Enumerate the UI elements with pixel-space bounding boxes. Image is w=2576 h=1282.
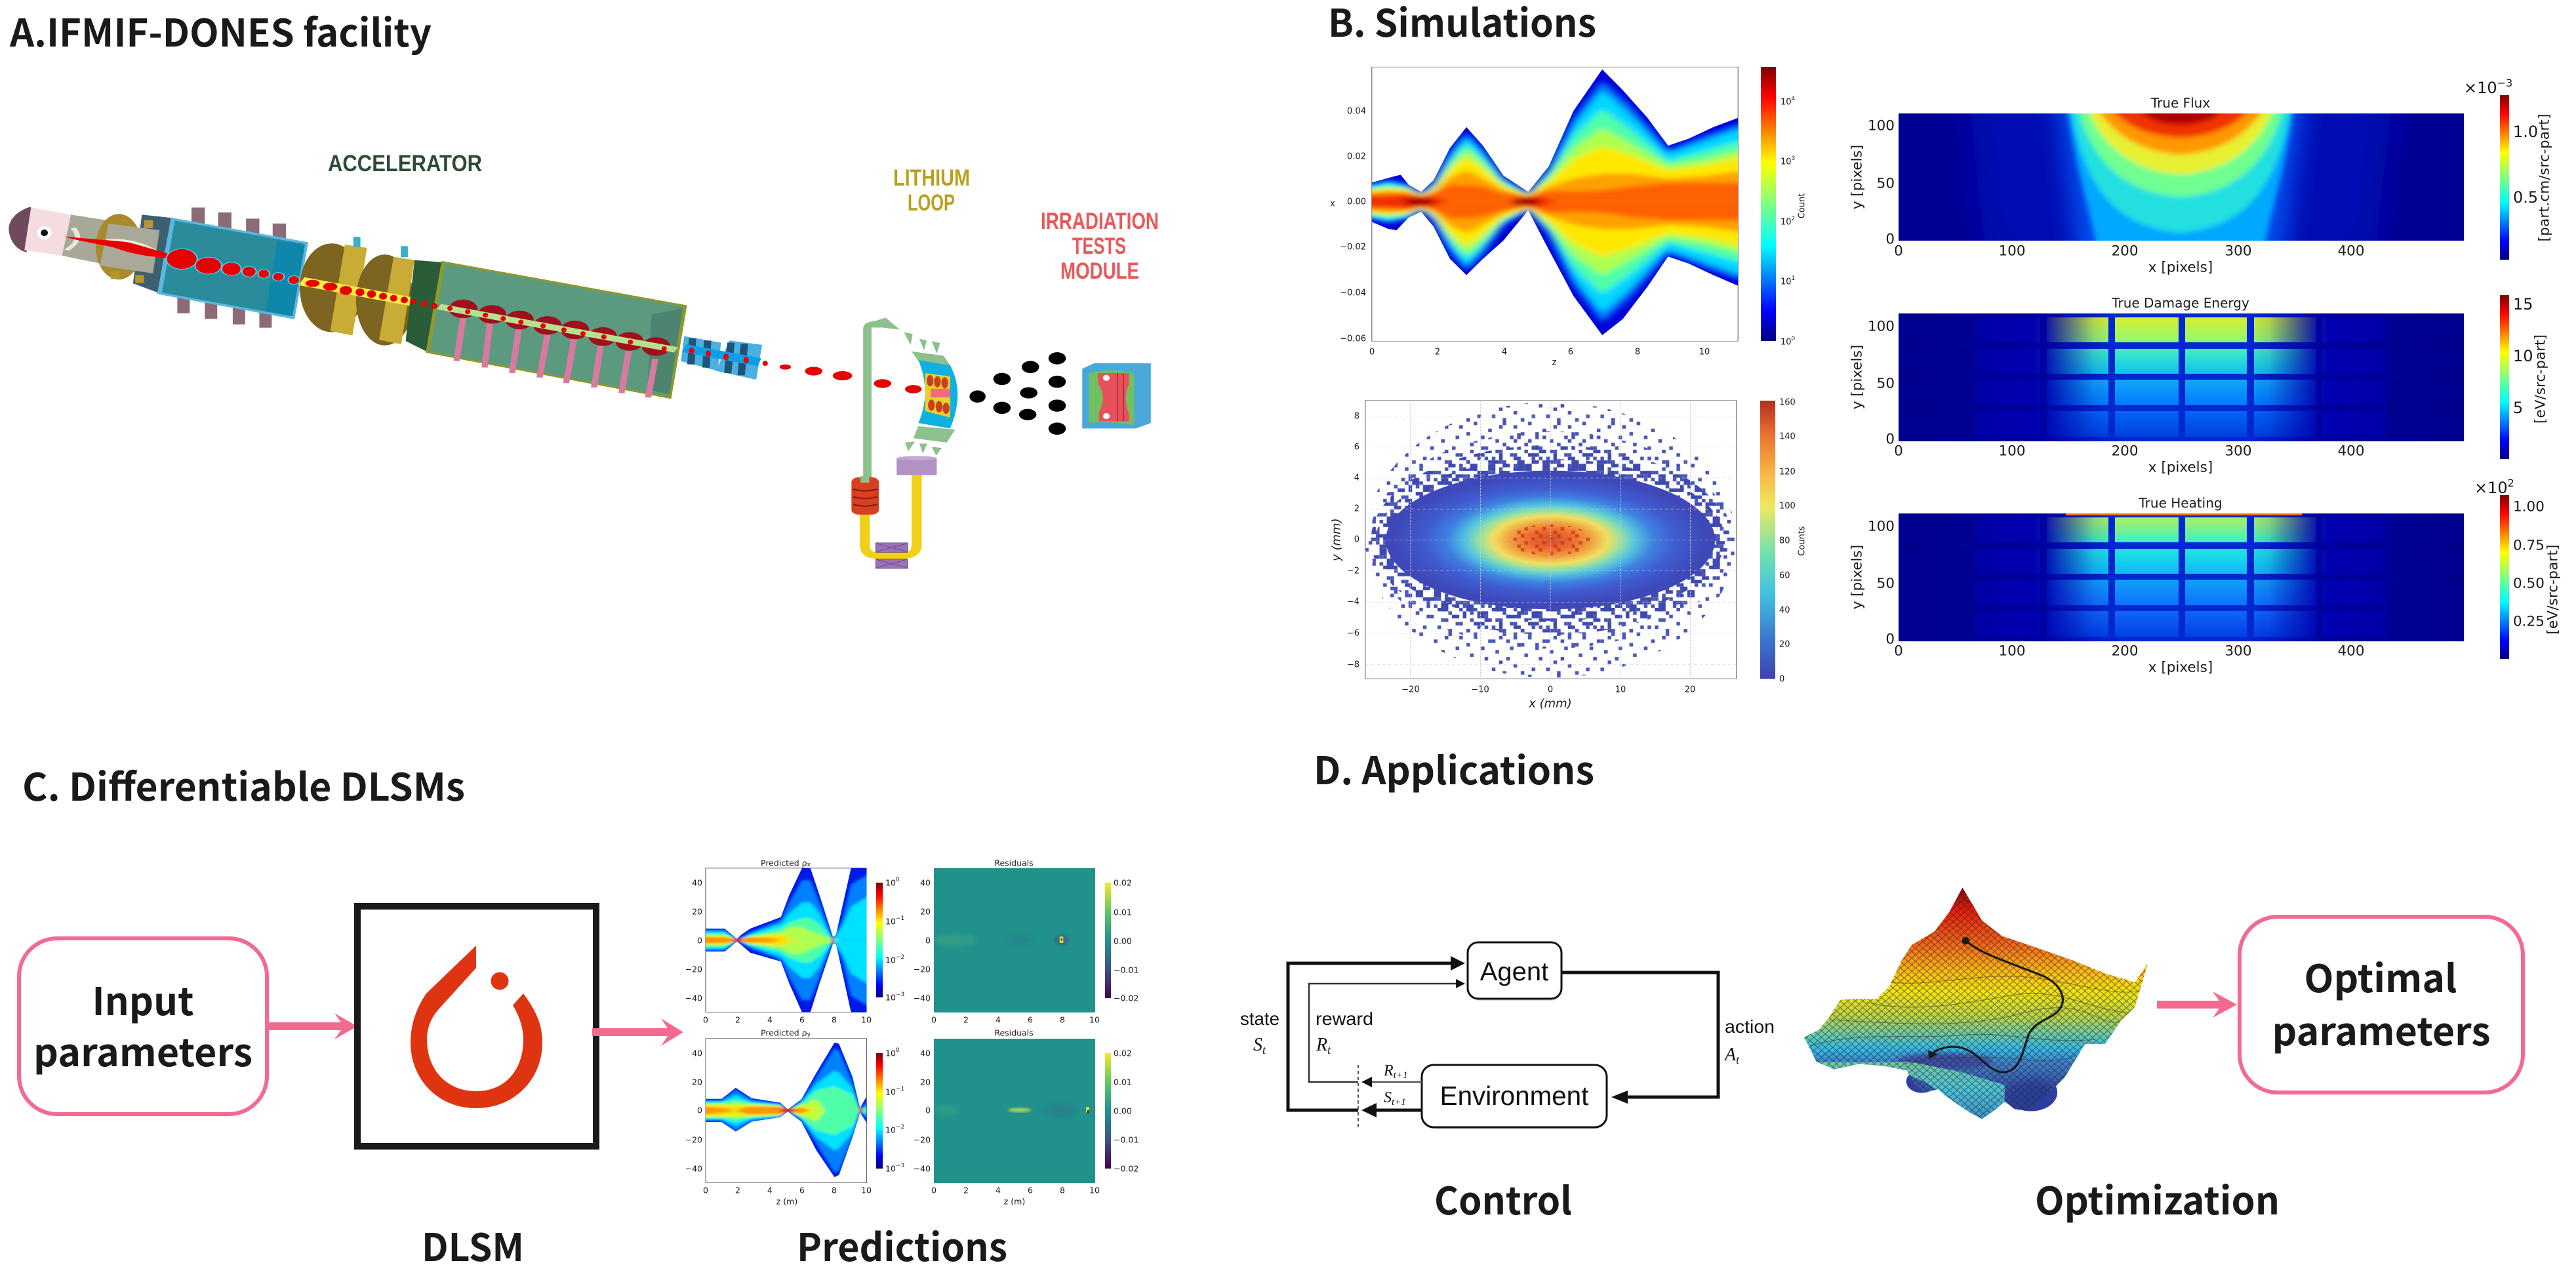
- prediction plot ticks and titles: 4: [996, 1186, 1001, 1195]
- axis titles: [1330, 518, 1572, 711]
- prediction plot ticks and titles: 2: [963, 1186, 969, 1195]
- axis ticks and labels: 0.04: [1347, 106, 1366, 117]
- return pipe and flow arrows: [856, 318, 942, 484]
- axis ticks and labels: 10: [1781, 337, 1792, 348]
- ticks and labels: [1849, 295, 2548, 476]
- axis ticks and labels: x: [1330, 199, 1335, 209]
- axis ticks and labels: −8: [1347, 660, 1359, 670]
- axis ticks and labels: 8: [1354, 412, 1359, 421]
- axis ticks and labels: 2: [1792, 216, 1795, 222]
- axis ticks and labels: 4: [1354, 473, 1359, 483]
- panel B: simulations: [1328, 0, 2562, 711]
- prediction plot ticks and titles: 0.01: [1114, 908, 1132, 917]
- input parameters box: Input: [92, 971, 194, 1026]
- axis ticks and labels: −20: [1401, 685, 1420, 695]
- ticks and labels: −3: [2497, 76, 2512, 89]
- loop labels: R: [1316, 1035, 1327, 1055]
- axis ticks and labels: 10: [1781, 97, 1792, 108]
- axis ticks and labels: 2: [1354, 504, 1359, 514]
- ticks and labels: 100: [1998, 643, 2026, 660]
- axis ticks and labels: 8: [1635, 348, 1640, 357]
- input parameters box: parameters: [33, 1022, 252, 1077]
- loop labels: t+1: [1394, 1070, 1407, 1081]
- axis ticks and labels: 4: [1502, 348, 1507, 357]
- ticks and labels: 0.75: [2513, 538, 2545, 553]
- loop labels: [1240, 1009, 1775, 1108]
- axis ticks and labels: 160: [1779, 397, 1796, 408]
- ticks and labels: 0.50: [2513, 576, 2545, 591]
- axis titles: x (mm): [1528, 696, 1572, 711]
- ticks and labels: x [pixels]: [2148, 459, 2213, 476]
- ticks and labels: True Flux: [2150, 95, 2210, 111]
- ticks and labels: 400: [2337, 243, 2365, 260]
- DLSM box: [357, 906, 596, 1146]
- prediction plot ticks and titles: 10: [885, 993, 896, 1002]
- axis ticks and labels: Count: [1797, 193, 1807, 218]
- ticks and labels: x [pixels]: [2148, 260, 2213, 275]
- accelerator illustration: [9, 207, 685, 397]
- caption: DLSM: DLSM: [422, 1217, 524, 1272]
- prediction plot ticks and titles: 4: [767, 1015, 773, 1024]
- prediction plot ticks and titles: Residuals: [994, 1028, 1034, 1037]
- prediction plot ticks and titles: 10: [885, 877, 896, 888]
- action arrow: [1562, 972, 1718, 1104]
- ticks and labels: 0: [1885, 231, 1895, 248]
- ticks and labels: 0.25: [2513, 614, 2545, 630]
- ticks and labels: 100: [1868, 518, 1895, 535]
- prediction plot ticks and titles: Residuals: [994, 858, 1034, 868]
- loop labels: R: [1384, 1062, 1394, 1079]
- panel C: differentiable DLSMs: [19, 757, 1138, 1272]
- colorbar: [1760, 401, 1775, 679]
- axis ticks and labels: 10: [1781, 218, 1792, 227]
- chart: optimization loss surface: [1799, 885, 2150, 1121]
- axis ticks and labels: 10: [1781, 277, 1792, 287]
- ticks and labels: 50: [1877, 176, 1895, 191]
- axis ticks and labels: [1330, 96, 1807, 367]
- heading D: D. Applications: [1314, 740, 1594, 795]
- loop labels: S: [1384, 1089, 1392, 1106]
- prediction plot ticks and titles: −20: [685, 1134, 702, 1145]
- ticks and labels: 1.0: [2513, 123, 2538, 141]
- prediction plot ticks and titles: 10: [885, 1087, 896, 1096]
- prediction plot ticks and titles: −20: [914, 964, 931, 974]
- prediction plot ticks and titles: −20: [685, 964, 702, 974]
- prediction plot ticks and titles: 0: [925, 935, 931, 946]
- chart: residuals rho x: [934, 868, 1111, 1012]
- beam bunches: [689, 348, 921, 393]
- ticks and labels: 50: [1877, 375, 1895, 392]
- axis ticks and labels: 0: [1792, 336, 1796, 342]
- axis ticks and labels: 0: [1548, 685, 1553, 695]
- axis ticks and labels: 4: [1792, 96, 1796, 102]
- prediction plot ticks and titles: −0.02: [1114, 1163, 1138, 1174]
- ticks and labels: 400: [2337, 443, 2365, 459]
- axis ticks and labels: −4: [1347, 597, 1359, 607]
- arrow: input to DLSM: [268, 1013, 357, 1039]
- ticks and labels: y [pixels]: [1849, 145, 1865, 209]
- prediction plot ticks and titles: 0: [896, 877, 900, 883]
- ticks and labels: 300: [2224, 643, 2252, 660]
- valves: [876, 543, 908, 569]
- axis ticks and labels: 120: [1779, 467, 1796, 477]
- label: lithium loop: LITHIUM: [893, 165, 970, 191]
- loop labels: t: [1327, 1043, 1331, 1056]
- loop labels: state: [1240, 1009, 1279, 1029]
- ticks and labels: ×10: [2464, 79, 2497, 97]
- loop labels: action: [1725, 1016, 1775, 1037]
- optimal parameters box: Optimal: [2304, 948, 2457, 1003]
- label: irradiation tests module: IRRADIATION: [1041, 209, 1159, 234]
- heat exchanger coil: [851, 476, 879, 515]
- prediction plot ticks and titles: 0.00: [1114, 936, 1132, 946]
- prediction plot ticks and titles: 2: [735, 1186, 740, 1195]
- diagram: reinforcement learning control loop: [1240, 942, 1775, 1129]
- prediction plot ticks and titles: 10: [885, 1048, 896, 1058]
- axis ticks and labels: 20: [1779, 640, 1790, 649]
- axis ticks and labels: −10: [1471, 685, 1489, 695]
- axis ticks and labels: −6: [1347, 628, 1359, 639]
- ticks and labels: [part.cm/src-part]: [2537, 114, 2552, 241]
- prediction plot ticks and titles: −0.02: [1114, 993, 1138, 1003]
- axis ticks and labels: 80: [1779, 536, 1790, 546]
- ticks and labels: y [pixels]: [1849, 545, 1865, 609]
- ion source: [9, 207, 106, 264]
- axis ticks and labels: 40: [1779, 606, 1790, 615]
- prediction plot ticks and titles: −40: [685, 1163, 702, 1174]
- ticks and labels: True Damage Energy: [2111, 295, 2249, 311]
- prediction plot ticks and titles: 40: [692, 877, 702, 888]
- agent box: Agent: [1480, 957, 1548, 986]
- prediction plot ticks and titles: 10: [861, 1186, 872, 1195]
- optimal parameters box: [2240, 917, 2523, 1092]
- prediction plot ticks and titles: 6: [799, 1186, 805, 1195]
- prediction plot ticks and titles: 20: [920, 906, 931, 917]
- prediction plot ticks and titles: z (m): [1004, 1196, 1025, 1207]
- ticks and labels: True Heating: [2138, 495, 2223, 511]
- dashed divider: [1358, 1065, 1359, 1129]
- prediction plot ticks and titles: Predicted ρ: [761, 858, 807, 868]
- ticks and labels: 200: [2111, 443, 2139, 459]
- prediction plot ticks and titles: z (m): [776, 1196, 797, 1207]
- prediction plot ticks and titles: Predicted ρ: [761, 1028, 807, 1037]
- LEBT block: [96, 214, 173, 293]
- prediction plot ticks and titles: −3: [896, 992, 904, 998]
- axis ticks and labels: −0.04: [1340, 289, 1366, 298]
- icon: PyTorch logo: [411, 946, 542, 1108]
- ticks and labels: [eV/src-part]: [2533, 334, 2548, 424]
- axis titles: y (mm): [1330, 518, 1343, 562]
- axis ticks and labels: 6: [1354, 442, 1359, 452]
- prediction plot ticks and titles: 8: [1060, 1186, 1065, 1195]
- label: accelerator: ACCELERATOR: [328, 151, 482, 176]
- prediction plot ticks and titles: 2: [963, 1015, 969, 1024]
- loop labels: S: [1253, 1035, 1262, 1055]
- prediction plot ticks and titles: 0.02: [1114, 1048, 1132, 1058]
- ticks and labels: 0: [1894, 443, 1903, 459]
- panel D: applications: [1240, 740, 2523, 1226]
- ticks and labels: [1849, 476, 2562, 675]
- axis ticks and labels: 10: [1615, 685, 1626, 695]
- colorbar: [1761, 67, 1776, 341]
- yellow pipes: [865, 475, 917, 555]
- axis ticks and labels: [1347, 397, 1807, 695]
- prediction plot ticks and titles: −40: [685, 993, 702, 1003]
- label: irradiation tests module: TESTS: [1072, 233, 1126, 259]
- prediction plot ticks and titles: 40: [692, 1048, 702, 1058]
- colorbar: [2500, 95, 2509, 260]
- ticks and labels: 1.00: [2513, 498, 2545, 515]
- prediction plot ticks and titles: 0: [697, 935, 702, 946]
- prediction plot ticks and titles: 0: [703, 1186, 708, 1195]
- label: lithium loop: [893, 165, 970, 216]
- loop labels: t+1: [1392, 1097, 1406, 1108]
- axis ticks and labels: 2: [1435, 348, 1440, 357]
- prediction plot ticks and titles: −1: [896, 915, 904, 922]
- chart: true heating: [1849, 476, 2562, 675]
- prediction plot ticks and titles: −20: [914, 1134, 931, 1145]
- ticks and labels: y [pixels]: [1849, 345, 1865, 409]
- axis ticks and labels: 100: [1779, 501, 1796, 511]
- ticks and labels: 15: [2513, 295, 2533, 313]
- prediction plot ticks and titles: 10: [885, 955, 896, 965]
- chart: predicted rho y: [702, 1039, 883, 1183]
- ticks and labels: 400: [2337, 643, 2365, 660]
- colorbar: [2500, 295, 2509, 459]
- prediction plot ticks and titles: 6: [799, 1015, 805, 1024]
- chart: beam envelope heatmap: [1330, 67, 1807, 367]
- panel A: IFMIF-DONES facility: [9, 3, 1159, 569]
- prediction plot ticks and titles: 20: [692, 906, 702, 917]
- loop labels: t: [1262, 1043, 1266, 1056]
- environment box: [1422, 1065, 1607, 1129]
- prediction plot ticks and titles: 10: [861, 1015, 872, 1024]
- arrow: DLSM to predictions: [592, 1018, 683, 1046]
- axis ticks and labels: 0: [1354, 535, 1359, 544]
- prediction plot ticks and titles: 0: [931, 1015, 936, 1024]
- chart: true flux: [1849, 76, 2552, 275]
- colorbar: [2500, 495, 2509, 659]
- quench tank: [896, 456, 936, 475]
- label: lithium loop: LOOP: [908, 190, 955, 216]
- loop labels: A: [1725, 1045, 1736, 1065]
- prediction plot ticks and titles: 40: [920, 877, 931, 888]
- heading A: A.IFMIF-DONES facility: [9, 3, 432, 58]
- RFQ pins: [177, 208, 286, 328]
- prediction plot ticks and titles: 10: [885, 1163, 896, 1174]
- prediction plot ticks and titles: 8: [1060, 1015, 1065, 1024]
- ticks and labels: 50: [1877, 576, 1895, 591]
- label: irradiation tests module: MODULE: [1060, 258, 1139, 284]
- arrow: optimization to optimal parameters: [2157, 992, 2237, 1018]
- ticks and labels: 0: [1894, 243, 1903, 260]
- prediction plot ticks and titles: 6: [1028, 1186, 1033, 1195]
- prediction plot ticks and titles: 20: [692, 1077, 702, 1087]
- ticks and labels: 200: [2111, 243, 2139, 260]
- ticks and labels: 100: [1998, 443, 2026, 459]
- MEBT/HEBT blue magnets: [681, 336, 762, 380]
- axis ticks and labels: 0: [1779, 674, 1784, 685]
- prediction plot ticks and titles: 0: [925, 1106, 931, 1115]
- axis ticks and labels: −0.02: [1340, 243, 1366, 252]
- ticks and labels: 300: [2224, 243, 2252, 260]
- prediction plot ticks and titles: [685, 858, 1138, 1207]
- prediction plot ticks and titles: −0.01: [1114, 965, 1138, 974]
- ticks and labels: x [pixels]: [2148, 660, 2213, 675]
- prediction plot ticks and titles: −1: [896, 1086, 904, 1092]
- ticks and labels: 0: [1885, 631, 1895, 648]
- neutrons: [969, 352, 1066, 435]
- reward arrow: [1309, 979, 1465, 1087]
- axis ticks and labels: 0: [1369, 348, 1375, 357]
- chart: beam cross-section scatter: [1330, 397, 1807, 711]
- ticks and labels: 100: [1868, 118, 1895, 134]
- prediction plot ticks and titles: −2: [896, 954, 904, 961]
- axis ticks and labels: 60: [1779, 571, 1790, 581]
- ticks and labels: 200: [2111, 643, 2139, 660]
- chart: predicted rho x: [702, 868, 883, 1012]
- prediction plot ticks and titles: 2: [735, 1015, 740, 1024]
- input parameters box: [19, 938, 267, 1114]
- prediction plot ticks and titles: 0.00: [1114, 1106, 1132, 1116]
- caption: predictions: Predictions: [797, 1217, 1007, 1272]
- prediction plot ticks and titles: 4: [767, 1186, 773, 1195]
- prediction plot ticks and titles: x: [807, 862, 811, 868]
- RFQ box: [159, 219, 306, 317]
- ticks and labels: 100: [1998, 243, 2026, 260]
- axis ticks and labels: z: [1552, 358, 1557, 367]
- prediction plot ticks and titles: 20: [920, 1077, 931, 1087]
- prediction plot ticks and titles: 0: [896, 1047, 900, 1054]
- axis ticks and labels: Counts: [1797, 526, 1807, 556]
- axis ticks and labels: 3: [1792, 155, 1795, 162]
- prediction plot ticks and titles: 40: [920, 1048, 931, 1058]
- agent box: [1468, 942, 1561, 1001]
- axis ticks and labels: 20: [1685, 685, 1695, 695]
- prediction plot ticks and titles: −40: [914, 993, 931, 1003]
- prediction plot ticks and titles: 0: [931, 1186, 936, 1195]
- environment box: Environment: [1440, 1081, 1588, 1111]
- prediction plot ticks and titles: −40: [914, 1163, 931, 1174]
- lithium loop and test module illustration: [681, 318, 1151, 569]
- prediction plot ticks and titles: 10: [1089, 1015, 1100, 1024]
- lithium target: [912, 351, 957, 443]
- optimal parameters box: parameters: [2272, 1001, 2491, 1056]
- chart: residuals rho y: [934, 1039, 1111, 1183]
- prediction plot ticks and titles: 10: [885, 917, 896, 926]
- SRF half discs: [300, 237, 414, 346]
- axis ticks and labels: −2: [1347, 567, 1359, 576]
- prediction plot ticks and titles: 8: [832, 1015, 837, 1024]
- test module: [1082, 363, 1151, 428]
- caption: optimization: Optimization: [2035, 1171, 2280, 1226]
- prediction plot ticks and titles: 0.01: [1114, 1077, 1132, 1087]
- ticks and labels: 5: [2513, 399, 2523, 417]
- ticks and labels: 10: [2513, 347, 2533, 365]
- prediction plot ticks and titles: 0: [697, 1106, 702, 1115]
- beam: [64, 236, 667, 351]
- chart: true damage energy: [1849, 295, 2548, 476]
- prediction plot ticks and titles: −3: [896, 1163, 904, 1169]
- ticks and labels: 0: [1894, 643, 1903, 660]
- ticks and labels: 300: [2224, 443, 2252, 459]
- HEBT tank: [406, 260, 685, 397]
- ticks and labels: 0.5: [2513, 188, 2538, 207]
- ticks and labels: 100: [1868, 319, 1895, 334]
- label: irradiation tests module: [1041, 209, 1159, 284]
- HEBT rings: [439, 300, 676, 356]
- ticks and labels: ×10: [2474, 479, 2508, 497]
- prediction plot ticks and titles: 10: [1089, 1186, 1100, 1195]
- loop labels: reward: [1316, 1009, 1373, 1029]
- axis ticks and labels: 1: [1792, 275, 1795, 282]
- ticks and labels: 2: [2508, 476, 2514, 489]
- axis ticks and labels: 0.02: [1347, 152, 1366, 161]
- prediction plot ticks and titles: 0: [703, 1015, 708, 1024]
- prediction plot ticks and titles: 0.02: [1114, 877, 1132, 888]
- caption: control: Control: [1434, 1171, 1572, 1226]
- axis ticks and labels: 140: [1779, 431, 1796, 442]
- axis ticks and labels: 10: [1699, 348, 1710, 357]
- HEBT stems: [456, 317, 655, 397]
- state arrow: [1288, 956, 1465, 1117]
- prediction plot ticks and titles: y: [807, 1032, 811, 1038]
- axis ticks and labels: 10: [1781, 157, 1792, 167]
- prediction plot ticks and titles: 6: [1028, 1015, 1033, 1024]
- ticks and labels: [eV/src-part]: [2545, 544, 2562, 635]
- prediction plot ticks and titles: −2: [896, 1124, 904, 1131]
- axis ticks and labels: 0.00: [1347, 197, 1366, 207]
- ticks and labels: 0: [1885, 431, 1895, 447]
- loop labels: t: [1736, 1053, 1740, 1066]
- prediction plot ticks and titles: −0.01: [1114, 1134, 1138, 1145]
- axis ticks and labels: 6: [1568, 348, 1573, 357]
- prediction plot ticks and titles: 8: [832, 1186, 837, 1195]
- ticks and labels: [1849, 76, 2552, 275]
- heading C: C. Differentiable DLSMs: [22, 757, 465, 812]
- prediction plot ticks and titles: 4: [996, 1015, 1001, 1024]
- prediction plot ticks and titles: 10: [885, 1125, 896, 1134]
- axis ticks and labels: −0.06: [1340, 334, 1366, 344]
